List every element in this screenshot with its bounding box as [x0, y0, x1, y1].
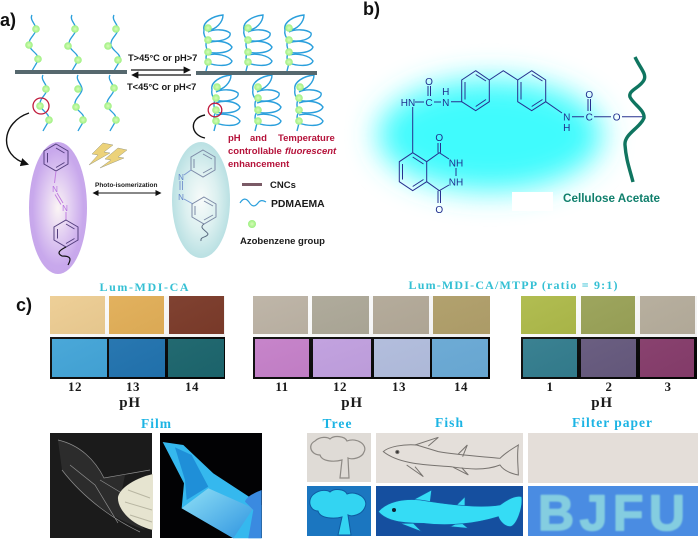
- CNC rod right with coiled chains: [196, 15, 323, 131]
- cyan glow: [378, 79, 602, 191]
- heading a: a): [0, 10, 16, 30]
- fish panel: Fish: [435, 415, 463, 430]
- fish panel: [376, 415, 523, 536]
- group Lum-MDI-CA/MTPP acidic: 2: [606, 379, 612, 394]
- CNC rod left with chains: [15, 15, 127, 131]
- group Lum-MDI-CA/MTPP basic: Lum-MDI-CA/MTPP (ratio = 9:1): [408, 278, 618, 292]
- lightning icons: [89, 143, 127, 168]
- molecule atom labels: [401, 77, 621, 216]
- BJFU fluorescent writing: BJFU: [538, 485, 685, 541]
- trans azobenzene capsule: N: [62, 204, 68, 213]
- tree fluorescent: [310, 490, 366, 535]
- molecule atom labels: O: [585, 90, 593, 101]
- film under daylight: [50, 433, 153, 538]
- panel b: Lum-MDI-CA structure: [363, 0, 660, 216]
- molecule atom labels: H: [563, 123, 570, 134]
- molecule atom labels: NH: [449, 158, 463, 170]
- molecule atom labels: C: [425, 98, 433, 109]
- film photos: [50, 416, 262, 538]
- filter paper panel: [528, 415, 698, 541]
- group Lum-MDI-CA/MTPP acidic: pH: [591, 395, 613, 411]
- legend: PDMAEMA: [271, 199, 325, 210]
- legend: [240, 180, 325, 247]
- group Lum-MDI-CA/MTPP basic: 11: [275, 379, 289, 394]
- group Lum-MDI-CA: 13: [126, 379, 140, 394]
- group Lum-MDI-CA: 14: [185, 379, 199, 394]
- group Lum-MDI-CA/MTPP basic: [253, 278, 618, 411]
- red callout text: enhancement: [228, 159, 290, 170]
- group Lum-MDI-CA/MTPP basic: 12: [333, 379, 347, 394]
- legend: CNCs: [270, 180, 296, 191]
- legend: Azobenzene group: [240, 236, 325, 247]
- panel c: colour and fluorescence results: [16, 278, 698, 541]
- reversible arrows with conditions: T>45°C or pH>7: [128, 53, 197, 63]
- group Lum-MDI-CA/MTPP acidic: 1: [546, 379, 554, 394]
- reversible arrows with conditions: T<45°C or pH<7: [127, 82, 196, 92]
- molecule atom labels: O: [425, 77, 433, 88]
- red callout text: fluorescent: [285, 146, 337, 157]
- red callout text: Temperature: [278, 133, 335, 144]
- reversible arrows with conditions: [127, 53, 197, 92]
- cellulose chain: [625, 57, 645, 182]
- fish fluorescent: [378, 490, 522, 532]
- fish sketch: [383, 437, 518, 477]
- molecule bonds: [399, 71, 643, 203]
- molecule atom labels: O: [435, 133, 443, 144]
- molecule atom labels: HN: [401, 98, 415, 109]
- molecule atom labels: C: [586, 112, 593, 124]
- panel a: thermo and pH responsive CNC scheme: [0, 10, 337, 274]
- tree panel: [307, 416, 371, 536]
- white patch: [512, 192, 553, 211]
- photo-isomerization arrow: Photo-isomerization: [95, 182, 158, 189]
- molecule atom labels: O: [613, 112, 621, 124]
- tree sketch: [311, 437, 365, 478]
- group Lum-MDI-CA: [50, 280, 225, 411]
- group Lum-MDI-CA/MTPP basic: 13: [392, 379, 406, 394]
- molecule atom labels: H: [442, 87, 449, 98]
- filter paper panel: Filter paper: [572, 415, 652, 430]
- group Lum-MDI-CA/MTPP acidic: 3: [664, 379, 672, 394]
- cis azobenzene capsule: N: [178, 173, 184, 182]
- group Lum-MDI-CA/MTPP acidic: [521, 296, 697, 411]
- red callout text: controllable: [228, 146, 282, 157]
- trans azobenzene capsule: [29, 142, 87, 274]
- molecule atom labels: N: [563, 112, 570, 124]
- cis azobenzene capsule: N: [178, 193, 184, 202]
- red callout text: [228, 133, 337, 170]
- group Lum-MDI-CA: Lum-MDI-CA: [100, 280, 189, 294]
- cellulose acetate label: Cellulose Acetate: [563, 191, 660, 205]
- cis azobenzene capsule: [172, 142, 230, 258]
- film under UV: [160, 433, 262, 538]
- group Lum-MDI-CA/MTPP basic: pH: [341, 395, 363, 411]
- group Lum-MDI-CA: pH: [119, 395, 141, 411]
- tree panel: Tree: [322, 416, 352, 431]
- red circles and curved arrows: [7, 98, 222, 164]
- molecule atom labels: NH: [449, 178, 463, 188]
- group Lum-MDI-CA: 12: [68, 379, 82, 394]
- heading c: c): [16, 295, 32, 315]
- red callout text: pH: [228, 133, 241, 144]
- group Lum-MDI-CA/MTPP basic: 14: [454, 379, 468, 394]
- molecule atom labels: N: [442, 98, 449, 109]
- red callout text: and: [250, 133, 267, 144]
- trans azobenzene capsule: N: [52, 185, 58, 194]
- molecule atom labels: O: [435, 205, 443, 216]
- film photos: Film: [141, 416, 172, 431]
- photo-isomerization arrow: [94, 182, 160, 193]
